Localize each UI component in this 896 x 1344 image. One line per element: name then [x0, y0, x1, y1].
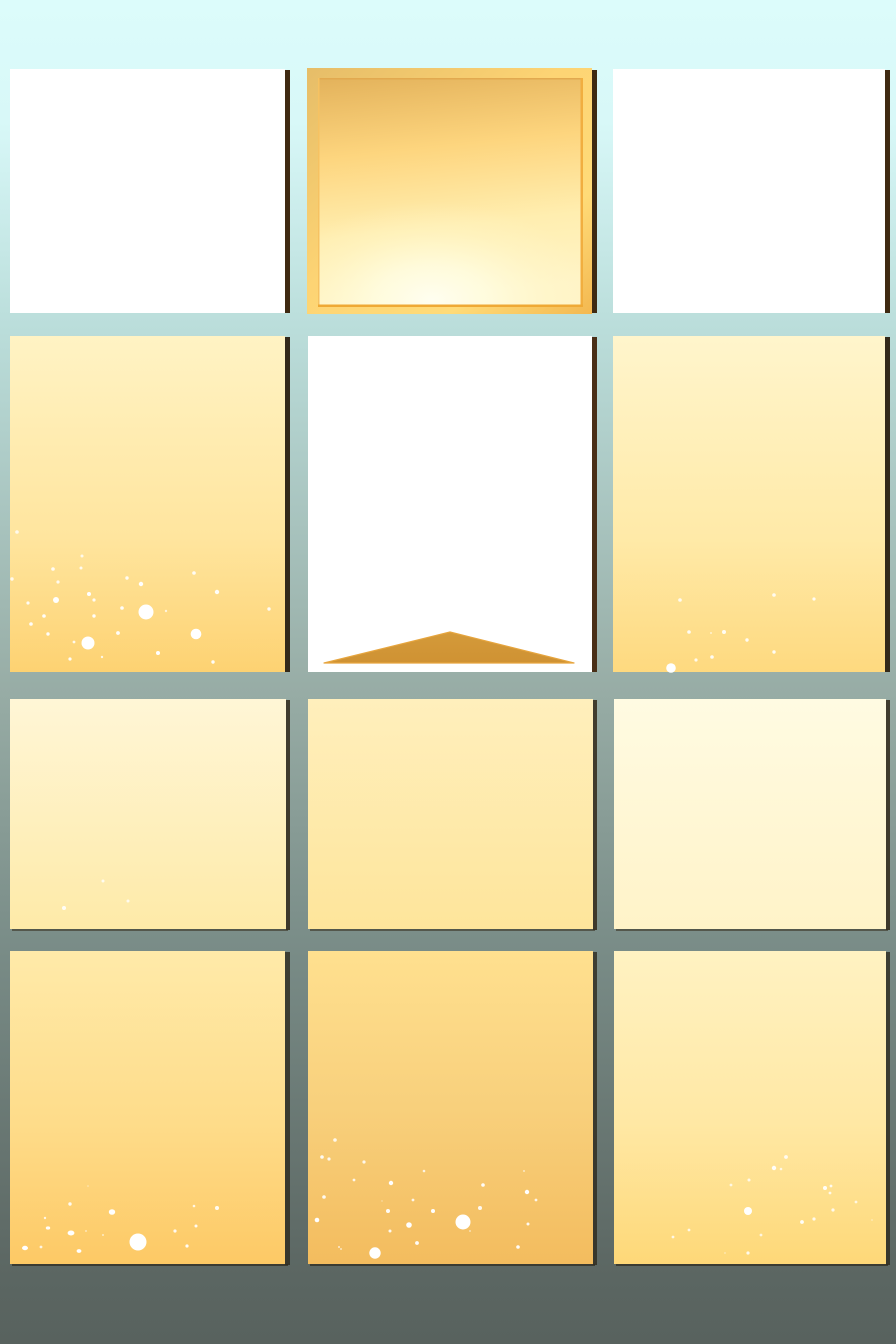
panel: row 4 left with sparkles — [10, 951, 290, 1266]
panel: row 2 right with sparkles — [613, 336, 890, 673]
panel: row 3 left — [10, 699, 290, 931]
row 1 panels — [10, 68, 890, 314]
icon: triangle — [324, 632, 574, 663]
panel: top centre gold frame — [307, 68, 597, 314]
row 2 panels — [10, 336, 890, 673]
row 4 panels — [10, 951, 890, 1266]
panel: row 4 centre with sparkles — [308, 951, 597, 1266]
panel: row 2 left with sparkles — [10, 336, 290, 672]
panel: row 2 centre with triangle — [308, 336, 597, 672]
panel: row 3 centre — [308, 699, 597, 931]
panel: row 4 right with sparkles — [614, 951, 890, 1266]
panel: top right blank — [613, 69, 890, 313]
panel: row 3 right — [614, 699, 890, 931]
panel: top left blank — [10, 69, 290, 313]
row 3 panels — [10, 699, 890, 931]
